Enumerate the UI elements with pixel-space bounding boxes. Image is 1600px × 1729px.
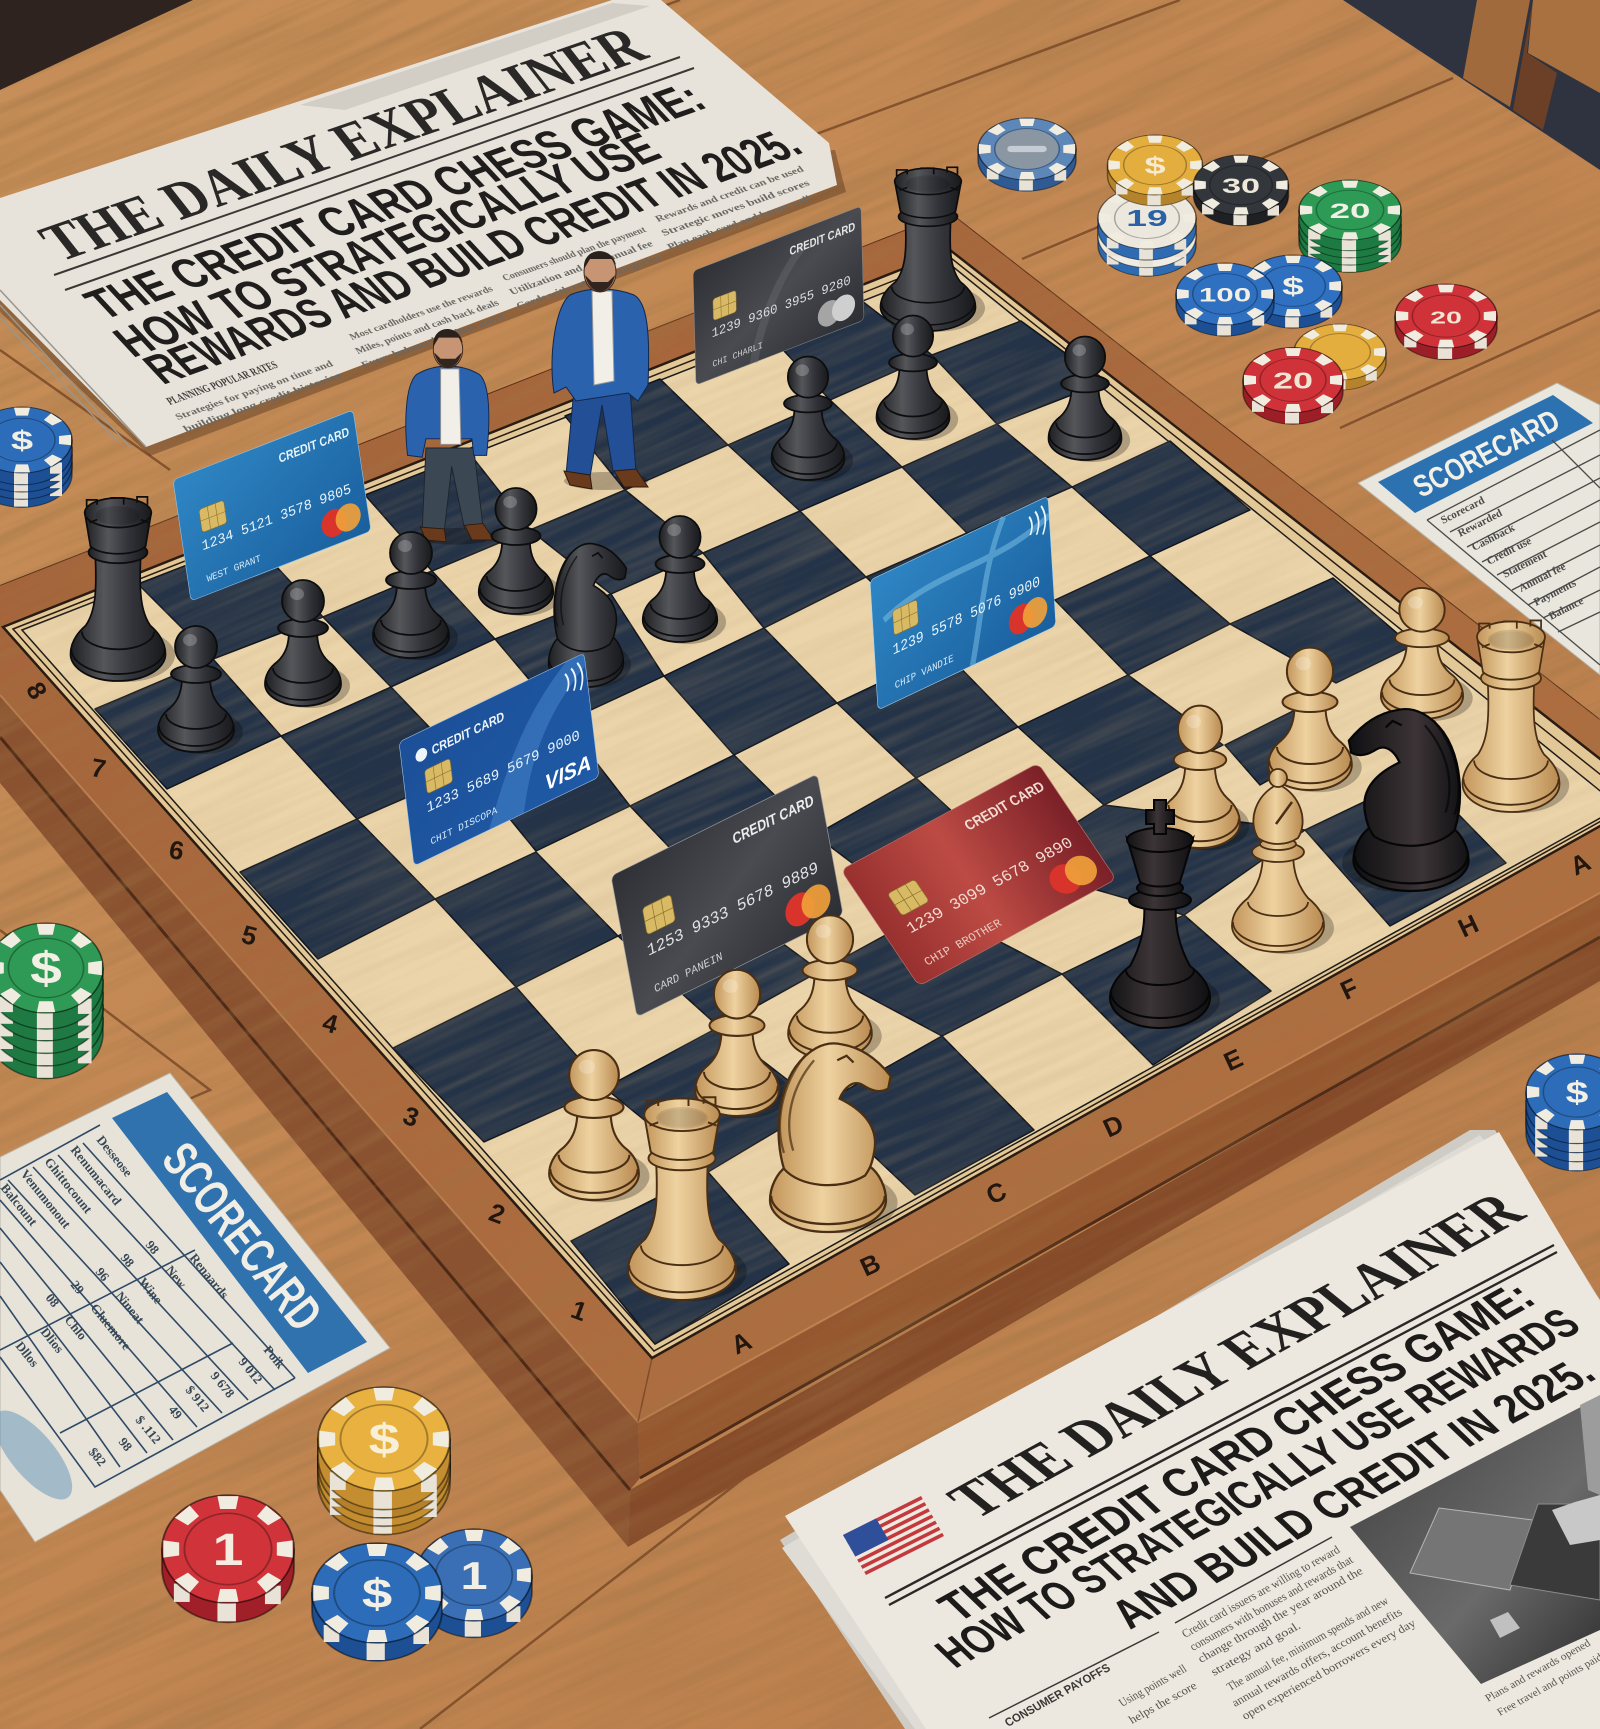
figure: man in blue suit, hands in pockets bbox=[406, 329, 494, 545]
poker chip: blue 100: 100 bbox=[1199, 283, 1251, 306]
body copy: top paper: PLANNING POPULAR RATES bbox=[163, 358, 281, 407]
dark room corner top left bbox=[0, 0, 193, 90]
body copy: top paper: Most cardholders use the rewards bbox=[347, 284, 496, 342]
scorecard: bottom left: 9 678 bbox=[208, 1368, 238, 1401]
scorecard: bottom left: Dlios bbox=[38, 1324, 67, 1356]
credit card: bright blue centre bbox=[870, 496, 1056, 710]
poker chip: dark 30 bbox=[1194, 155, 1288, 226]
poker chip: yellow lower bbox=[1294, 324, 1386, 390]
black rook: top bbox=[880, 167, 985, 332]
masthead: bottom paper: THE DAILY EXPLAINER bbox=[934, 1182, 1540, 1529]
poker chip: red 1: 1 bbox=[213, 1524, 243, 1575]
credit card: blue left: CREDIT CARD bbox=[278, 424, 350, 466]
credit card: red lying flat: CREDIT CARD bbox=[962, 779, 1048, 834]
black pawn bbox=[158, 626, 243, 754]
credit card: dark top: 1239 9360 3955 9280 bbox=[711, 273, 851, 341]
board coordinate labels: A bbox=[1565, 846, 1595, 881]
figure: man in blue suit, standing tall bbox=[552, 251, 649, 490]
board coordinate labels: C bbox=[981, 1175, 1011, 1210]
black knight bbox=[1342, 709, 1468, 892]
credit card: dark bottom: CREDIT CARD bbox=[731, 792, 815, 848]
body copy: top paper: building long credit histories bbox=[181, 371, 344, 434]
credit card: navy visa: CHIT DISCOPA bbox=[430, 805, 499, 849]
scorecard: right bbox=[1358, 383, 1600, 675]
poker chip: red 20 bbox=[1243, 348, 1343, 424]
poker chip: red 1 bbox=[162, 1495, 294, 1622]
body copy: top paper: Miles, points and cash back deals bbox=[353, 298, 502, 356]
poker chip: blue dollar: $ bbox=[1282, 272, 1304, 300]
poker chip stack: green 20: 20 bbox=[1330, 199, 1370, 223]
scorecard: right: Rewarded bbox=[1456, 507, 1504, 540]
poker chip stack: blue right bbox=[1526, 1054, 1600, 1171]
board coordinate labels: 2 bbox=[485, 1197, 509, 1230]
credit card: dark bottom: CARD PANEIN bbox=[653, 950, 724, 997]
board inlay border bbox=[3, 250, 1600, 1358]
credit card: navy visa: VISA bbox=[544, 750, 592, 796]
credit card: navy visa: 1233 5689 5679 9000 bbox=[426, 728, 581, 817]
chess board checker squares bbox=[20, 266, 1600, 1345]
scorecard: bottom left: Wine bbox=[136, 1274, 166, 1307]
headline: top paper: THE CREDIT CARD CHESS GAME: bbox=[73, 74, 717, 328]
newspaper: top left bbox=[0, 0, 837, 447]
board coordinate labels: H bbox=[1453, 908, 1483, 943]
poker chip: blue dollar bottom bbox=[312, 1543, 442, 1661]
body copy: bottom paper: consumers with bonuses and rewards that bbox=[1187, 1552, 1356, 1653]
scorecard: bottom left: Desseose bbox=[94, 1132, 136, 1180]
white pawn bbox=[1381, 588, 1473, 721]
credit card: blue left bbox=[173, 410, 371, 601]
black pawn bbox=[877, 316, 958, 441]
chessboard wood frame bbox=[0, 218, 1600, 1547]
white bishop bbox=[1232, 769, 1334, 954]
scorecard: bottom left: 08 bbox=[43, 1290, 63, 1310]
scorecard: right: Annual fee bbox=[1517, 561, 1568, 595]
scorecard: bottom left: 98 bbox=[116, 1434, 136, 1454]
black pawn bbox=[643, 516, 726, 644]
poker chip: dark 30: 30 bbox=[1222, 174, 1260, 198]
board coordinate labels: 5 bbox=[238, 919, 260, 952]
white pawn bbox=[549, 1050, 649, 1202]
white pawn bbox=[788, 915, 882, 1061]
scorecard: bottom left bbox=[0, 1073, 390, 1542]
credit card: blue left: 1234 5121 3578 9805 bbox=[201, 482, 352, 555]
black pawn bbox=[1049, 337, 1130, 462]
scorecard: bottom left: $ .112 bbox=[133, 1412, 164, 1447]
credit card: dark top: CREDIT CARD bbox=[789, 219, 856, 259]
scorecard: bottom left: Chlo bbox=[62, 1312, 90, 1343]
grey knight bbox=[548, 543, 631, 688]
board coordinate labels: F bbox=[1336, 972, 1363, 1006]
board coordinate labels: D bbox=[1098, 1108, 1128, 1143]
poker chip: grey blue top bbox=[978, 118, 1076, 191]
wall and chair top right bbox=[1343, 0, 1600, 170]
poker chip stack: yellow dollar: $ bbox=[369, 1415, 400, 1464]
black pawn bbox=[772, 357, 853, 482]
body copy: top paper: Plan each card and bonus well bbox=[665, 194, 814, 252]
scorecard: bottom left: Gluemore bbox=[88, 1300, 134, 1353]
shadow: top newspaper bbox=[0, 150, 846, 456]
scorecard: right: Statement bbox=[1501, 548, 1549, 581]
body copy: bottom paper: strategy and goal. bbox=[1208, 1618, 1303, 1678]
body copy: top paper bbox=[163, 164, 814, 434]
poker chip stack: blue white 19: 19 bbox=[1126, 205, 1168, 231]
white knight bbox=[770, 1043, 898, 1233]
newspaper: bottom right bbox=[780, 1130, 1600, 1729]
credit card: red lying flat: CHIP BROTHER bbox=[922, 917, 1005, 969]
scorecard: right: Scorecard bbox=[1439, 494, 1487, 527]
board coordinate labels: 6 bbox=[167, 834, 186, 866]
poker chip: yellow dollar: $ bbox=[1144, 151, 1166, 179]
scorecard: bottom left: Poik bbox=[261, 1342, 289, 1372]
scorecard: right: Balance bbox=[1547, 595, 1586, 623]
board coordinate labels: 1 bbox=[567, 1294, 591, 1327]
body copy: top paper: Utilization and the annual fee bbox=[507, 239, 656, 297]
body copy: bottom paper: open experienced borrowers every day bbox=[1239, 1616, 1418, 1722]
credit card: dark bottom: 1253 9333 5678 9889 bbox=[646, 858, 820, 961]
flag icon bbox=[843, 1496, 944, 1575]
board coordinate labels: 3 bbox=[399, 1100, 423, 1133]
scorecard: right: Credit use bbox=[1485, 535, 1534, 568]
poker chip: blue dollar bbox=[1244, 255, 1342, 328]
masthead: top paper: THE DAILY EXPLAINER bbox=[27, 15, 659, 272]
credit card: navy visa bbox=[399, 653, 599, 866]
black pawn bbox=[373, 532, 458, 660]
board coordinate labels: B bbox=[855, 1247, 885, 1282]
poker chip stack: green left bbox=[0, 923, 103, 1079]
poker chip stack: blue left bbox=[0, 407, 72, 507]
scorecard: bottom left: Renumacard bbox=[68, 1142, 125, 1209]
poker chip: red right: 20 bbox=[1430, 308, 1462, 328]
body copy: bottom paper: Credit card issuers are willing to reward bbox=[1179, 1543, 1342, 1640]
poker chip: blue 1: 1 bbox=[460, 1555, 488, 1598]
white pawn bbox=[1268, 648, 1362, 792]
headline: top paper: REWARDS AND BUILD CREDIT IN 2025. bbox=[132, 119, 813, 393]
credit card: dark top: CHI CHARLI bbox=[712, 340, 763, 370]
black king bbox=[1110, 800, 1220, 1028]
poker chip: red 20: 20 bbox=[1273, 368, 1313, 394]
poker chip stack: yellow dollar bbox=[318, 1387, 450, 1535]
scorecard: bottom left: $ 912 bbox=[183, 1382, 213, 1415]
scorecard: bottom left: $82 bbox=[86, 1444, 110, 1469]
board coordinate labels: A bbox=[726, 1325, 756, 1360]
scorecard: bottom left: SCORECARD bbox=[151, 1132, 333, 1341]
board coordinate labels: 8 bbox=[20, 677, 53, 704]
scorecard: right: Cashback bbox=[1470, 521, 1518, 554]
poker chip: blue 1 bbox=[416, 1529, 532, 1638]
scorecard: bottom left: 98 bbox=[118, 1250, 138, 1270]
body copy: top paper: Consumers should plan the payment bbox=[500, 225, 649, 283]
credit card: dark top bbox=[693, 206, 864, 385]
white rook: right bbox=[1462, 620, 1569, 813]
white pawn bbox=[1160, 706, 1249, 850]
poker chip: blue 100 bbox=[1176, 263, 1274, 336]
white rook: front bbox=[628, 1097, 747, 1301]
scorecard: bottom left: New bbox=[163, 1262, 190, 1291]
poker chip: red right bbox=[1395, 284, 1497, 360]
board coordinate labels bbox=[20, 677, 1595, 1360]
body copy: bottom paper: annual rewards offers, account benefits bbox=[1229, 1605, 1405, 1709]
scorecard: bottom left: Ghittocount bbox=[42, 1154, 96, 1217]
body copy: top paper: Cards with rotating categories bbox=[514, 253, 663, 311]
body copy: top paper: Every balance is a chess move bbox=[359, 312, 508, 370]
scorecard: bottom left: 96 bbox=[93, 1264, 113, 1284]
credit card: blue left: WEST GRANT bbox=[206, 553, 262, 585]
scorecard: right: Payments bbox=[1532, 577, 1579, 609]
poker chip stack: blue right: $ bbox=[1566, 1075, 1588, 1109]
board coordinate labels: 7 bbox=[89, 752, 108, 784]
scorecard: bottom left: Renaards bbox=[187, 1250, 232, 1301]
credit card: bright blue centre: CHIP VANDIE bbox=[895, 654, 954, 693]
black pawn bbox=[479, 488, 562, 616]
poker chip stack: green left: $ bbox=[30, 943, 62, 993]
scorecard: bottom left: 9 012 bbox=[236, 1354, 266, 1387]
credit card: red lying flat bbox=[841, 763, 1116, 986]
scorecard: bottom left: 98 bbox=[143, 1237, 163, 1257]
scorecard: bottom left: Venumonout bbox=[18, 1166, 74, 1232]
credit card: red lying flat: 1239 3099 5678 9890 bbox=[903, 834, 1077, 938]
white pawn bbox=[695, 970, 789, 1118]
newspaper photo bbox=[1350, 1395, 1600, 1684]
poker chip stack: blue white 19 bbox=[1098, 187, 1196, 276]
body copy: bottom paper: change through the year around the bbox=[1195, 1564, 1365, 1665]
body copy: top paper: Rewards and credit can be used bbox=[653, 164, 807, 224]
poker chip stack: green 20 bbox=[1299, 180, 1401, 272]
credit card: bright blue centre: 1239 5578 5076 9900 bbox=[892, 574, 1041, 660]
scorecard: bottom left: 29 bbox=[68, 1277, 88, 1297]
body copy: bottom paper bbox=[1002, 1543, 1600, 1729]
body copy: top paper: Strategic moves build scores bbox=[659, 178, 812, 238]
board coordinate labels: 4 bbox=[319, 1007, 342, 1040]
scorecard: right: SCORECARD bbox=[1407, 403, 1566, 504]
body copy: bottom paper: CONSUMER PAYOFFS bbox=[1002, 1661, 1113, 1729]
poker chip: yellow dollar bbox=[1108, 135, 1202, 206]
poker chip stack: blue left: $ bbox=[11, 426, 33, 455]
body copy: bottom paper: The annual fee, minimum spends and new bbox=[1224, 1594, 1391, 1693]
scorecard: bottom left: Dllos bbox=[13, 1338, 42, 1370]
credit card: dark bottom bbox=[611, 774, 843, 1017]
credit card: navy visa: CREDIT CARD bbox=[431, 708, 505, 758]
headline: top paper: HOW TO STRATEGICALLY USE bbox=[102, 124, 672, 366]
body copy: bottom paper: Plans and rewards opened bbox=[1483, 1637, 1593, 1704]
body copy: top paper: Strategies for paying on time and bbox=[173, 359, 336, 422]
scorecard: bottom left: 49 bbox=[166, 1402, 186, 1422]
body copy: bottom paper: Using points well bbox=[1116, 1661, 1190, 1709]
black pawn bbox=[265, 580, 350, 708]
poker chip: blue dollar bottom: $ bbox=[362, 1571, 392, 1617]
scorecard: bottom left: Nineat bbox=[113, 1288, 148, 1327]
black rook: left bbox=[70, 497, 175, 682]
body copy: bottom paper: helps the score bbox=[1126, 1679, 1199, 1726]
board coordinate labels: E bbox=[1219, 1043, 1247, 1077]
